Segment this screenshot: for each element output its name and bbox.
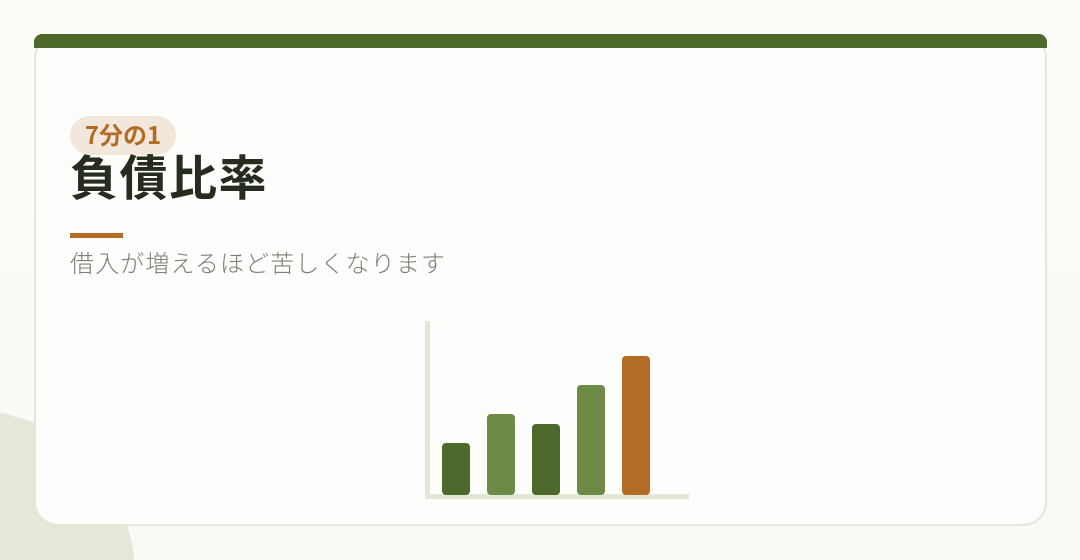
subtitle: 借入が増えるほど苦しくなります [70, 244, 446, 279]
bar 5 [622, 356, 650, 495]
bar chart [425, 321, 689, 499]
badge [70, 116, 176, 155]
bar 4 [577, 385, 605, 495]
title: 負債比率 [70, 139, 268, 209]
top bar [34, 34, 1047, 48]
bar 3 [532, 424, 560, 495]
accent divider [70, 233, 123, 238]
decorative circle [0, 412, 134, 560]
bar 2 [487, 414, 515, 495]
y axis [425, 321, 430, 499]
bar 1 [442, 443, 470, 495]
x axis [425, 494, 689, 499]
badge: 7分の1 [85, 116, 161, 151]
